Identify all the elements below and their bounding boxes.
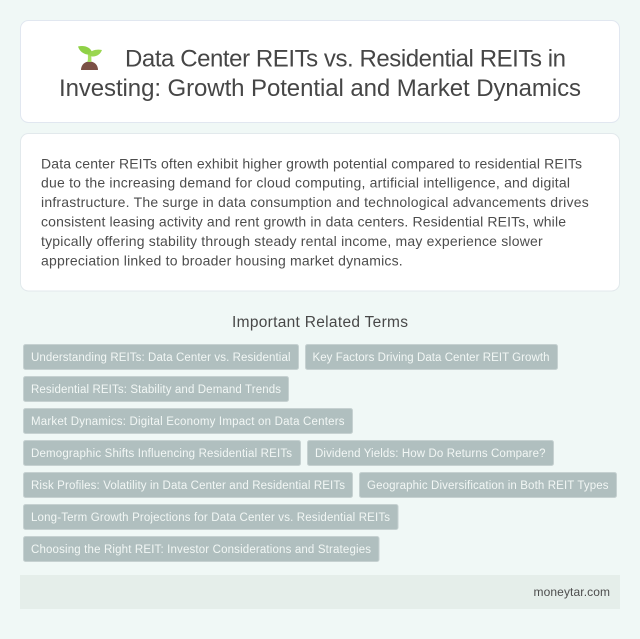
paragraph text: typically offering stability through steady rental income, may experience slower [41, 233, 543, 249]
paragraph text: Data center REITs often exhibit higher growth potential compared to residential REITs [41, 155, 582, 171]
tag: key factors [306, 344, 558, 370]
tag: risk profiles [24, 472, 352, 498]
tag: long-term growth: Long-Term Growth Projections for Data Center vs. Residential REITs [31, 512, 390, 524]
tag: demographic shifts [24, 440, 300, 466]
tag: geographic diversification: Geographic Diversification in Both REIT Types [367, 480, 609, 492]
tag: dividend yields: Dividend Yields: How Do Returns Compare? [315, 448, 546, 460]
panel: summary paragraph [20, 134, 620, 291]
tag: market dynamics [24, 408, 352, 434]
paragraph text: consistent leasing activity and rent growth in data centers. Residential REITs, while [41, 214, 566, 230]
panel: related terms tags [24, 344, 616, 562]
tag: geographic diversification [360, 472, 616, 498]
footer source: moneytar.com [534, 585, 610, 599]
tag: choosing the right REIT: Choosing the Right REIT: Investor Considerations and Strategies [31, 544, 371, 556]
tag: long-term growth [24, 504, 398, 530]
tag: choosing the right REIT [24, 536, 379, 562]
heading: important related terms: Important Related Terms [232, 314, 408, 331]
tag: understanding REITs: Understanding REITs: Data Center vs. Residential [31, 352, 290, 364]
footer bar [20, 575, 620, 609]
tag: residential stability: Residential REITs: Stability and Demand Trends [31, 384, 281, 396]
tag: key factors: Key Factors Driving Data Center REIT Growth [312, 352, 550, 364]
panel: title card [20, 20, 620, 122]
paragraph text: infrastructure. The surge in data consumption and technological advancements drives [41, 194, 589, 210]
title text [59, 46, 581, 102]
tag: market dynamics: Market Dynamics: Digital Economy Impact on Data Centers [31, 416, 345, 428]
icon: sprout [78, 46, 102, 70]
tag: risk profiles: Risk Profiles: Volatility in Data Center and Residential REITs [31, 480, 345, 492]
paragraph text: appreciation linked to broader housing market dynamics. [41, 252, 403, 268]
paragraph text [41, 155, 589, 268]
paragraph text: due to the increasing demand for cloud computing, artificial intelligence, and digital [41, 175, 570, 191]
tag: dividend yields [308, 440, 554, 466]
title text: Data Center REITs vs. Residential REITs in [125, 46, 566, 72]
title text: Investing: Growth Potential and Market Dynamics [59, 75, 581, 102]
tag: demographic shifts: Demographic Shifts Influencing Residential REITs [31, 448, 292, 460]
tag: understanding REITs [24, 344, 298, 370]
tag: residential stability [24, 376, 288, 402]
